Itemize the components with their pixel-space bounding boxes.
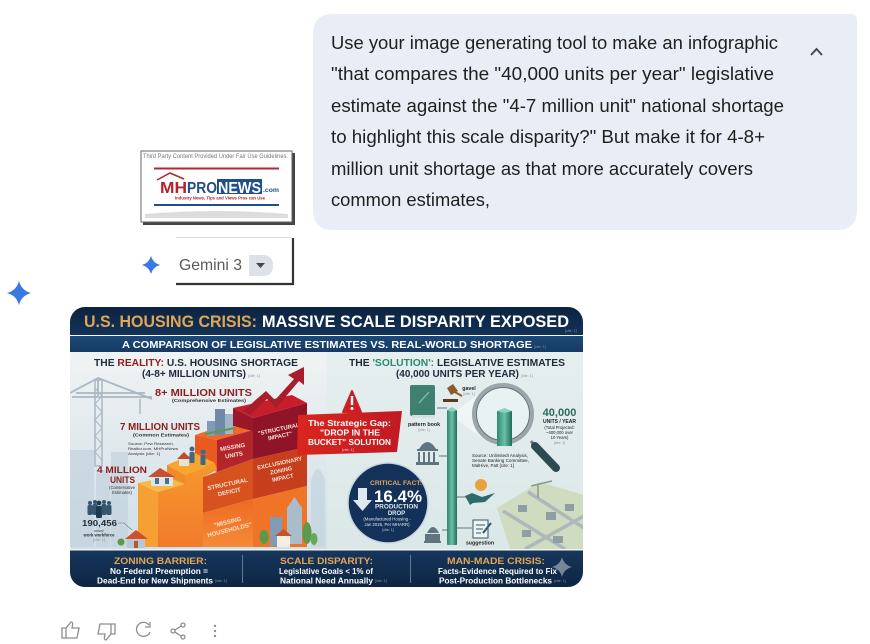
lower right face [253, 486, 307, 547]
subtitle band [70, 336, 583, 352]
title: U.S. HOUSING CRISIS: [84, 313, 257, 331]
main front face [158, 463, 217, 547]
40,000 units stat: (Total Projected: [544, 425, 575, 430]
shortage labels: [cite: 1] [93, 538, 105, 542]
MHProNews logo box: Third Party Content Provided Under Fair Use Guidelines. [143, 153, 288, 160]
zoning barrier: Dead-End for New Shipments [97, 576, 214, 586]
step labels: DEFICIT [217, 487, 242, 498]
step labels: "STRUCTURAL [257, 423, 300, 437]
city silhouettes [70, 450, 325, 547]
footer band [70, 549, 583, 587]
step labels: "MISSING [213, 517, 242, 529]
step 1 left face [138, 483, 158, 547]
zoning barrier: ZONING BARRIER: [114, 556, 207, 567]
prompt text: to highlight this scale disparity?" But make it for 4-8+ [331, 127, 765, 147]
scale disparity: [cite: 1] [375, 579, 387, 583]
critical fact circle [348, 463, 428, 543]
green column: legislative estimate [437, 392, 482, 545]
man-made crisis: MAN-MADE CRISIS: [447, 556, 545, 567]
callout: the strategic gap: The Strategic Gap: [308, 418, 391, 428]
prompt text: "that compares the "40,000 units per year" legislative [331, 64, 774, 84]
icon: hand with coin [465, 479, 495, 505]
icon: house on 4M step [148, 468, 175, 486]
magnified bar [497, 411, 512, 446]
40,000 units stat: UNITS / YEAR [543, 419, 576, 425]
40,000 units stat: 10 Years) [551, 435, 569, 440]
subtitle band: [cite: 1] [534, 345, 546, 349]
source note: MalHive, Patt [cite: 1] [472, 463, 514, 468]
right panel heading: the solution: THE 'SOLUTION': LEGISLATIVE ESTIMATES [349, 358, 565, 369]
prompt text: common estimates, [331, 190, 490, 210]
man-made crisis: Post-Production Bottlenecks [439, 576, 553, 586]
step labels: EXCLUSIONARY [257, 456, 303, 472]
left panel heading: the reality: [cite: 1] [248, 374, 260, 378]
shortage labels: (Comprehensive Estimates) [172, 398, 246, 404]
icon: pattern book [408, 385, 440, 432]
prompt text: million unit shortage as that more accurately covers [331, 159, 753, 179]
icon: workers group [88, 500, 112, 518]
4 million: 4 MILLION [97, 465, 147, 476]
header band: MASSIVE SCALE DISPARITY EXPOSED [262, 313, 569, 331]
icon: warning triangle [343, 391, 361, 412]
MHProNews logo box: MH [160, 180, 187, 197]
left panel heading: the reality: (4-8+ MILLION UNITS) [142, 369, 246, 380]
right panel heading: the solution [349, 358, 565, 380]
source note: Source: UnlimitedI Analysis, [472, 453, 528, 458]
step 3 left face [195, 435, 217, 472]
exclusionary zoning face [253, 447, 307, 499]
callout: the strategic gap: BUCKET" SOLUTION [308, 437, 391, 447]
prompt text [331, 33, 784, 210]
icon: suggestion document: suggestion [466, 540, 494, 546]
critical fact circle: CRITICAL FACT: [370, 481, 422, 487]
icon: more menu [214, 625, 216, 637]
right panel heading: the solution: [cite: 1] [521, 374, 533, 378]
critical fact circle: 16.4% [374, 487, 422, 506]
critical fact circle: PRODUCTION [375, 504, 418, 510]
shortage labels: UNITS [110, 475, 135, 486]
big block top [233, 395, 307, 418]
icon: thumbs up [62, 622, 79, 638]
zoning barrier [97, 556, 227, 586]
infographic card [70, 307, 584, 587]
neighborhood map [497, 481, 584, 549]
7 million: 7 MILLION UNITS [120, 422, 200, 433]
icon: thumbs down [98, 624, 115, 640]
structural deficit face [203, 459, 253, 513]
icon: down arrow [353, 488, 372, 511]
40,000 units stat: [cite: 1] [554, 441, 565, 445]
shortage labels: Source: Pew Research, [128, 441, 174, 446]
big block left face [233, 408, 253, 431]
step labels: HOUSEHOLDS" [207, 522, 252, 539]
dropdown button [249, 255, 273, 276]
towers on 7M step [205, 409, 235, 436]
step labels [205, 423, 306, 539]
scale disparity: Legislative Goals < 1% of [279, 567, 373, 576]
icon: second capitol [424, 527, 441, 543]
zoning barrier: [cite: 1] [215, 579, 227, 583]
icon: roof [157, 173, 184, 180]
structural impact face [253, 403, 307, 459]
critical fact circle: Jan 2026, Per MHARR) [364, 522, 410, 527]
missing units face [217, 430, 253, 472]
source note: Senate Banking Committee, [472, 458, 529, 463]
icon: gavel: [cite: 1] [463, 392, 475, 396]
chat bubble: user prompt [313, 14, 857, 230]
Gemini 3 model label [142, 237, 293, 284]
shortage labels [82, 387, 252, 542]
icon: share [171, 623, 185, 639]
shortage labels: Estimates) [112, 490, 132, 495]
scale disparity: SCALE DISPARITY: [280, 556, 373, 567]
callout: the strategic gap: [cite: 1] [342, 448, 354, 452]
scale disparity: National Need Annually [280, 576, 374, 586]
shortage labels: union/ [94, 529, 104, 533]
MHProNews logo box [141, 151, 295, 225]
MHProNews logo box: PRO [187, 180, 217, 197]
icon: base house [118, 530, 148, 548]
subtitle band: A COMPARISON OF LEGISLATIVE ESTIMATES VS. REAL-WORLD SHORTAGE [122, 339, 532, 351]
prompt text: estimate against the "4-7 million unit" national shortage [331, 96, 784, 116]
callout: the strategic gap: "DROP IN THE [320, 428, 380, 438]
icon: red growth arrow [243, 367, 304, 415]
icon: house and family on upper step [177, 446, 206, 466]
lower face [203, 499, 253, 547]
shortage labels: Realtor.com, MHProNews [128, 446, 178, 451]
40,000 units stat: 40,000 [543, 407, 576, 419]
Gemini 3 model label: Gemini 3 [179, 257, 242, 274]
MHProNews logo box: .com [263, 187, 279, 194]
zoning barrier: No Federal Preemption = [110, 567, 208, 576]
icon: watermark sparkle [552, 557, 572, 577]
skyline on right column [260, 497, 318, 547]
shortage labels: work workforce [83, 532, 115, 538]
action icons row [62, 622, 216, 640]
critical fact circle: [cite: 1] [382, 528, 394, 532]
icon: capitol building [416, 442, 439, 465]
40,000 units stat: ~400,000 over [546, 430, 574, 435]
right panel heading: the solution: (40,000 UNITS PER YEAR) [396, 369, 519, 380]
callout: the strategic gap [297, 391, 402, 455]
body background [70, 350, 327, 552]
prompt text: Use your image generating tool to make an infographic [331, 33, 778, 53]
step 3 top [195, 425, 253, 440]
man-made crisis: Facts-Evidence Required to Fix [438, 567, 558, 576]
step 2 top [167, 453, 215, 475]
step labels: UNITS [225, 451, 244, 460]
shortage labels: (Conservative [109, 485, 136, 490]
critical fact circle: DROP [388, 511, 405, 517]
crane [70, 378, 152, 466]
magnifying glass [474, 385, 556, 468]
40,000 units stat [543, 407, 576, 445]
shortage labels: (Common Estimates) [133, 432, 189, 438]
icon: small Gemini sparkle [142, 256, 160, 274]
step labels: IMPACT [272, 473, 295, 484]
critical fact circle: (Manufactured Housing - [363, 516, 411, 522]
source note [472, 453, 529, 468]
header band: [cite: 1] [565, 329, 577, 333]
icon: gavel: gavel [462, 386, 476, 392]
man-made crisis: [cite: 1] [554, 579, 566, 583]
scale disparity [279, 556, 387, 586]
left panel heading: the reality: THE REALITY: U.S. HOUSING SHORTAGE [94, 358, 298, 369]
icon: collapse chevron [811, 49, 822, 55]
icon: Gemini sparkle [7, 281, 31, 305]
8+ million: 8+ MILLION UNITS [155, 387, 252, 399]
icon: gavel [443, 384, 476, 402]
icon: pattern book: [cite: 1] [418, 428, 430, 432]
step 1 top [138, 480, 185, 492]
shortage labels: Analysis [cite: 1] [128, 451, 160, 456]
left panel heading: the reality [94, 358, 298, 380]
step labels: ZONING [270, 466, 293, 477]
icon: redo [137, 622, 150, 636]
workforce stat: 190,456 [82, 518, 117, 528]
icon: suggestion document [466, 520, 494, 546]
step labels: IMPACT" [268, 431, 293, 442]
step labels: STRUCTURAL [207, 478, 248, 492]
step 2 left face [167, 465, 185, 485]
header band [70, 307, 583, 335]
icon: pattern book: pattern book [408, 422, 440, 428]
MHProNews logo box: Industry News, Tips and Views Pros can Use [175, 196, 265, 200]
staircase chart of housing shortage [138, 367, 318, 547]
man-made crisis [438, 556, 566, 586]
step labels: MISSING [220, 443, 246, 453]
MHProNews logo box: NEWS [218, 180, 261, 197]
